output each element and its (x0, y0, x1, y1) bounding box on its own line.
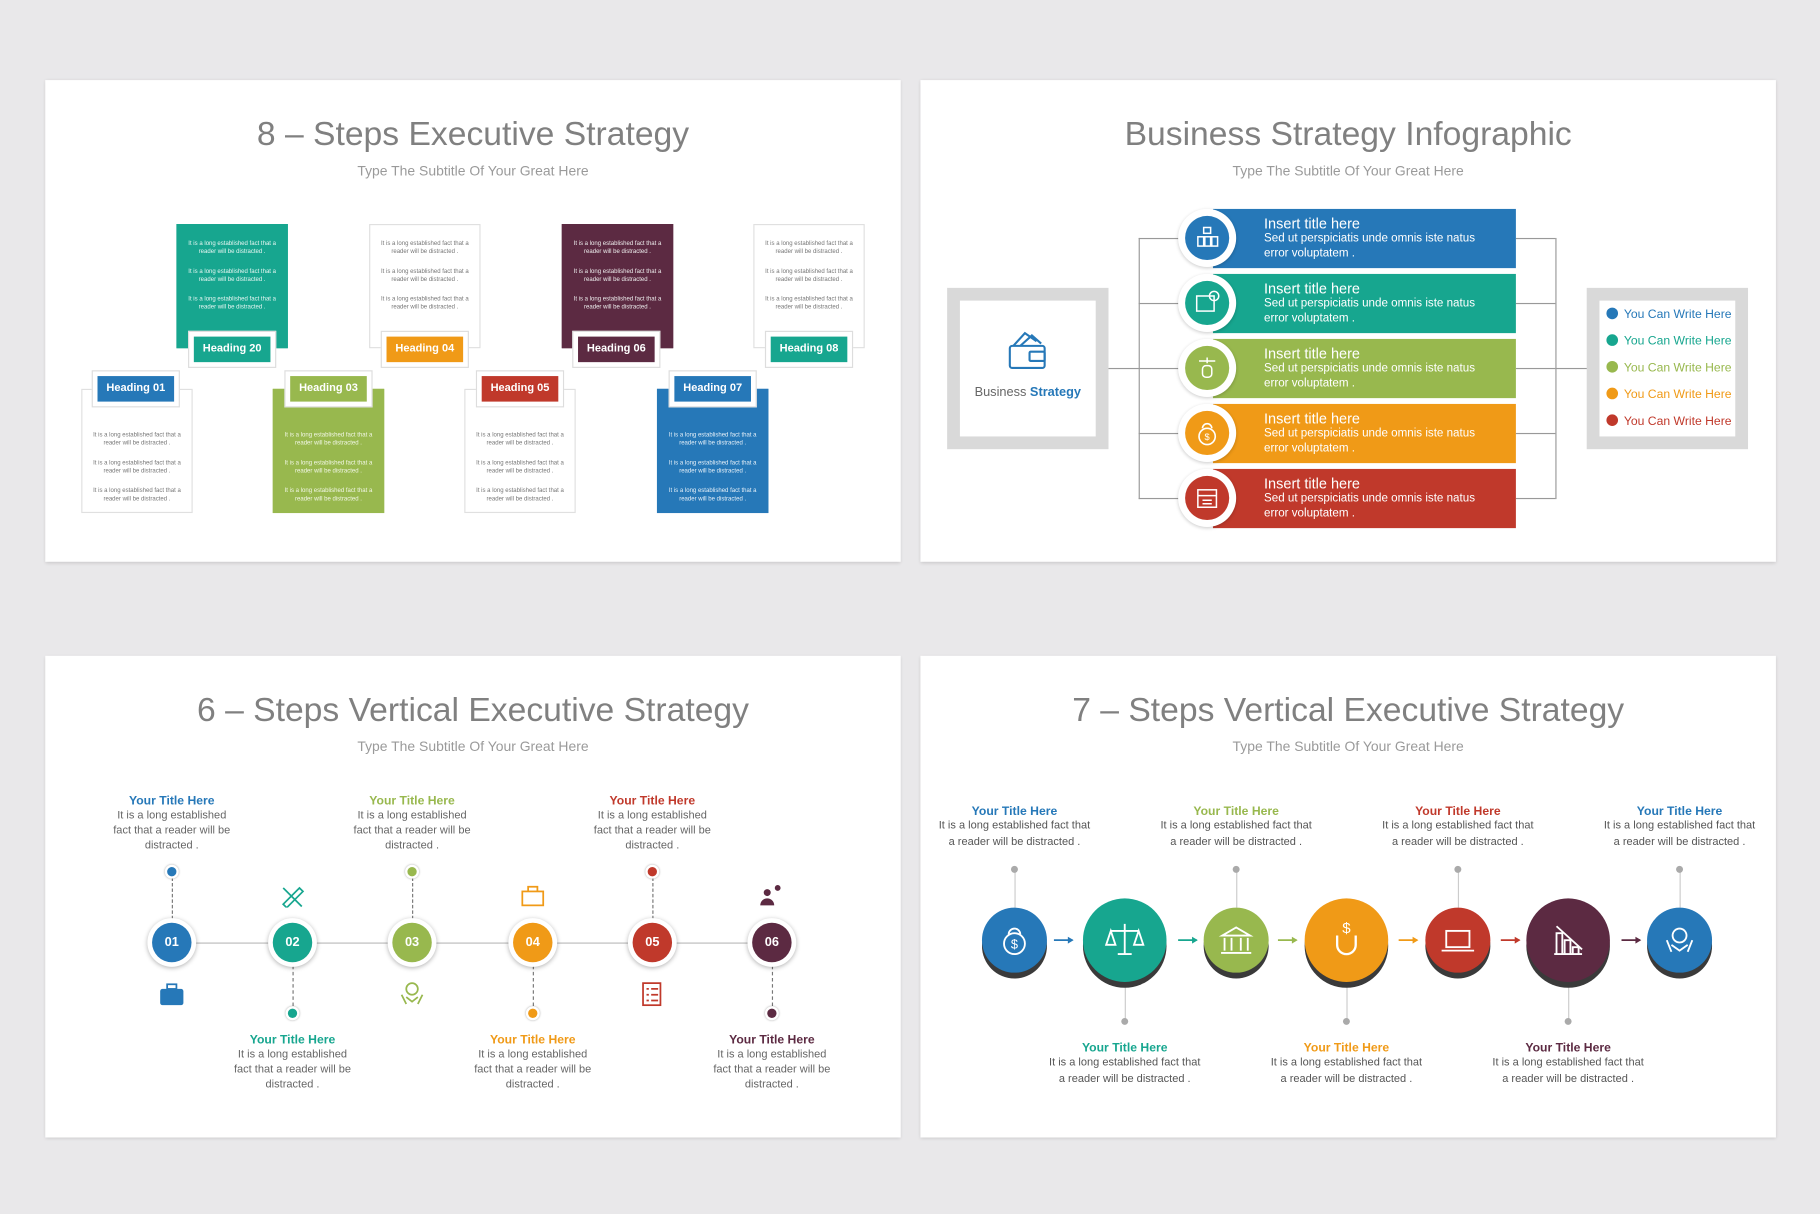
bar 2 teal: Sed ut perspiciatis unde omnis iste natus (1264, 297, 1475, 310)
card: heading 07 blue: reader will be distracted . (679, 440, 746, 447)
icon: wallet (1008, 332, 1046, 369)
text 7-3: a reader will be distracted . (1170, 835, 1302, 848)
card: heading 05 white (464, 389, 576, 513)
text step 04 (474, 1033, 591, 1091)
heading 01 (92, 370, 180, 407)
title: 6 – Steps Vertical Executive Strategy (197, 692, 749, 729)
title: Business Strategy Infographic (1125, 116, 1572, 153)
card: heading 06 purple: reader will be distracted . (584, 276, 651, 283)
card: heading 04 white: reader will be distracted . (391, 248, 458, 255)
card: heading 05 white: It is a long established fact that a (476, 432, 564, 439)
text 7-1: It is a long established fact that (939, 819, 1090, 832)
bar 4 orange: error voluptatem . (1264, 442, 1355, 454)
circle 3 green (1204, 908, 1269, 973)
text step 02: Your Title Here (250, 1033, 335, 1047)
bar 5 red: Insert title here (1264, 476, 1360, 492)
bar 3 green: Sed ut perspiciatis unde omnis iste natus (1264, 362, 1475, 375)
connectors left (1108, 238, 1178, 500)
card: heading 20 teal: reader will be distracted . (199, 248, 266, 255)
text step 04: distracted . (506, 1078, 560, 1091)
circle 1 blue (982, 908, 1047, 973)
text 7-4: It is a long established fact that (1271, 1056, 1422, 1069)
step 02: 02 (285, 936, 300, 949)
card: heading 08 white (753, 224, 865, 348)
card: heading 08 white: reader will be distracted . (776, 304, 842, 311)
text 7-3 (1160, 804, 1312, 848)
circle 6 purple (1526, 898, 1610, 982)
bar 5 red: error voluptatem . (1264, 507, 1355, 519)
circle 5 red (1425, 908, 1490, 973)
icon circle 4: $ (1205, 432, 1210, 442)
icon circle 2 (1178, 274, 1236, 332)
title: 7 – Steps Vertical Executive Strategy (1072, 692, 1624, 729)
heading 08 (765, 331, 853, 368)
icon: briefcase (160, 983, 184, 1006)
text step 01: It is a long established (117, 809, 226, 822)
subtitle: Type The Subtitle Of Your Great Here (1233, 162, 1464, 179)
timeline line (172, 942, 772, 944)
bar 5 red: Sed ut perspiciatis unde omnis iste natus (1264, 492, 1475, 505)
text step 05: fact that a reader will be (594, 824, 711, 837)
bar 2 teal: error voluptatem . (1264, 312, 1355, 324)
card: heading 01 white: It is a long established fact that a (93, 432, 181, 439)
card: heading 05 white: It is a long established fact that a (476, 487, 564, 494)
card: heading 08 white: reader will be distracted . (776, 248, 842, 255)
card: heading 20 teal: It is a long established fact that a (188, 268, 276, 275)
step 01 (147, 918, 196, 967)
card: heading 08 white: It is a long established fact that a (765, 240, 853, 247)
text step 06: It is a long established (717, 1048, 826, 1061)
text step 02: It is a long established (238, 1048, 347, 1061)
card: heading 05 white: reader will be distracted . (487, 440, 553, 447)
text 7-2 (1049, 1041, 1200, 1085)
text 7-3: It is a long established fact that (1160, 819, 1312, 832)
text 7-7: a reader will be distracted . (1614, 835, 1745, 848)
text 7-6: Your Title Here (1525, 1041, 1611, 1055)
bar 5 red (1213, 469, 1516, 528)
heading 06 (572, 331, 660, 368)
card: heading 03 green: It is a long established fact that a (285, 432, 372, 439)
panel: 8 steps executive strategy (45, 80, 901, 562)
text 7-5: a reader will be distracted . (1392, 835, 1524, 848)
subtitle: Type The Subtitle Of Your Great Here (1233, 738, 1464, 754)
icon: checklist (642, 982, 662, 1006)
card: heading 03 green (273, 389, 384, 513)
step 03 (388, 918, 436, 967)
card: heading 01 white: It is a long established fact that a (93, 487, 181, 494)
card: heading 07 blue: reader will be distracted . (679, 468, 746, 475)
text step 03 (354, 794, 471, 852)
card: heading 07 blue: It is a long established fact that a (669, 460, 757, 467)
heading 08: Heading 08 (780, 342, 838, 355)
card: heading 04 white: It is a long established fact that a (381, 268, 469, 275)
card: heading 04 white (369, 224, 481, 348)
card: heading 01 white: reader will be distracted . (103, 468, 170, 475)
icon circle 3 (1178, 339, 1236, 397)
step 04 (508, 918, 557, 967)
dots (165, 865, 179, 879)
text 7-2: Your Title Here (1082, 1041, 1168, 1055)
card: heading 01 white (81, 389, 193, 513)
heading 01: Heading 01 (106, 382, 165, 395)
card: heading 07 blue: reader will be distracted . (679, 496, 746, 503)
subtitle: Type The Subtitle Of Your Great Here (357, 162, 589, 179)
text step 06: Your Title Here (729, 1033, 815, 1047)
card: heading 06 purple: reader will be distracted . (584, 248, 651, 255)
text 7-5 (1382, 804, 1534, 848)
heading 07 (669, 370, 757, 407)
text step 02 (234, 1033, 351, 1091)
text 7-6 (1492, 1041, 1644, 1085)
circle 4 orange: $ (1342, 920, 1351, 937)
label: Business Strategy (975, 385, 1081, 399)
heading 03 (284, 370, 373, 407)
icon: hands money (400, 982, 424, 1004)
text 7-7 (1604, 804, 1756, 848)
step 01: 01 (165, 936, 179, 949)
text step 04: Your Title Here (490, 1033, 576, 1047)
text 7-2: It is a long established fact that (1049, 1056, 1200, 1069)
connectors right (1516, 238, 1587, 500)
text 7-6: It is a long established fact that (1492, 1056, 1644, 1069)
text 7-5: It is a long established fact that (1382, 819, 1534, 832)
text step 02: fact that a reader will be (234, 1063, 351, 1076)
card: heading 20 teal: It is a long established fact that a (188, 296, 276, 303)
arrows (1054, 936, 1642, 944)
card: heading 03 green: reader will be distracted . (295, 496, 362, 503)
card: heading 20 teal: reader will be distracted . (199, 276, 266, 283)
legend items: You Can Write Here (1624, 308, 1732, 322)
text step 03: distracted . (385, 839, 439, 852)
text step 02: distracted . (266, 1078, 319, 1091)
bar 4 orange: Sed ut perspiciatis unde omnis iste natus (1264, 427, 1475, 440)
icon circle 5 (1178, 469, 1236, 527)
text 7-7: Your Title Here (1637, 804, 1722, 818)
card: heading 01 white: reader will be distracted . (103, 440, 170, 447)
text 7-3: Your Title Here (1193, 804, 1279, 818)
heading 05 (476, 370, 564, 407)
heading 20 (188, 331, 276, 368)
card: heading 07 blue (657, 389, 768, 513)
text step 01: distracted . (145, 839, 199, 852)
step 03: 03 (405, 936, 419, 949)
text step 05 (594, 794, 711, 852)
bar 3 green: Insert title here (1264, 346, 1360, 362)
text 7-4: Your Title Here (1304, 1041, 1389, 1055)
legend box (1587, 288, 1748, 449)
card: heading 03 green: It is a long established fact that a (285, 460, 372, 467)
bar 4 orange: Insert title here (1264, 411, 1360, 427)
text 7-7: It is a long established fact that (1604, 819, 1755, 832)
panel: business strategy infographic (920, 80, 1776, 562)
icon: bag (521, 886, 544, 906)
icon: people (760, 885, 781, 906)
text step 05: Your Title Here (610, 794, 695, 808)
card: heading 08 white: It is a long established fact that a (765, 268, 853, 275)
text step 03: It is a long established (357, 809, 467, 822)
heading 05: Heading 05 (491, 382, 549, 395)
text step 01: fact that a reader will be (113, 824, 230, 837)
text 7-6: a reader will be distracted . (1502, 1072, 1634, 1085)
text 7-2: a reader will be distracted . (1059, 1072, 1191, 1085)
icon circle 4 (1178, 404, 1236, 462)
heading 04 (381, 331, 469, 368)
card: heading 06 purple: It is a long established fact that a (574, 296, 661, 303)
bar 2 teal (1213, 274, 1516, 333)
panel: 6 steps vertical (45, 656, 901, 1137)
step 05 (628, 918, 677, 967)
heading 07: Heading 07 (683, 382, 742, 395)
text: You Can Write Here (1624, 334, 1732, 348)
dashed connectors (172, 877, 173, 919)
text 7-4: a reader will be distracted . (1281, 1072, 1412, 1085)
card: heading 04 white: It is a long established fact that a (381, 240, 469, 247)
subtitle: Type The Subtitle Of Your Great Here (357, 738, 589, 754)
card: heading 07 blue: It is a long established fact that a (669, 487, 757, 494)
card: heading 07 blue: It is a long established fact that a (669, 432, 757, 439)
card: heading 03 green: reader will be distracted . (295, 468, 362, 475)
bar 1 blue (1213, 209, 1516, 268)
gray connectors (1014, 871, 1016, 908)
text 7-5: Your Title Here (1415, 804, 1501, 818)
card: heading 20 teal: reader will be distracted . (199, 304, 266, 311)
text step 06: distracted . (745, 1078, 799, 1091)
text step 01: Your Title Here (129, 794, 215, 808)
text step 04: It is a long established (478, 1048, 587, 1061)
card: heading 05 white: reader will be distracted . (487, 468, 553, 475)
card: heading 01 white: It is a long established fact that a (93, 460, 181, 467)
bar 2 teal: Insert title here (1264, 281, 1360, 297)
text step 01 (113, 794, 230, 852)
circle 2 teal (1083, 898, 1167, 982)
bar 4 orange (1213, 404, 1516, 463)
card: heading 04 white: reader will be distracted . (391, 304, 458, 311)
circle 4 orange (1305, 898, 1388, 982)
card: heading 03 green: reader will be distracted . (295, 440, 362, 447)
heading 06: Heading 06 (587, 342, 646, 355)
heading 03: Heading 03 (299, 382, 358, 395)
circle 7 blue (1647, 908, 1712, 973)
card: heading 08 white: It is a long established fact that a (765, 296, 853, 303)
card: heading 20 teal (176, 224, 288, 348)
bar 1 blue: Insert title here (1264, 216, 1360, 232)
text 7-1 (939, 804, 1090, 848)
step 04: 04 (526, 936, 540, 949)
heading 20: Heading 20 (203, 342, 262, 355)
card: heading 05 white: reader will be distracted . (487, 496, 553, 503)
text: You Can Write Here (1624, 414, 1732, 428)
step 06 (747, 918, 796, 967)
step 05: 05 (645, 936, 659, 949)
text step 05: distracted . (625, 839, 679, 852)
bar 1 blue: Sed ut perspiciatis unde omnis iste natus (1264, 232, 1475, 245)
card: heading 01 white: reader will be distracted . (103, 496, 170, 503)
card: heading 06 purple (562, 224, 673, 348)
circle 1 blue: $ (1011, 936, 1018, 951)
panel: 7 steps vertical (920, 656, 1776, 1137)
card: heading 08 white: reader will be distracted . (776, 276, 842, 283)
card: heading 04 white: It is a long established fact that a (381, 296, 469, 303)
text 7-4 (1271, 1041, 1422, 1085)
title: 8 – Steps Executive Strategy (257, 116, 689, 153)
text 7-1: a reader will be distracted . (949, 835, 1080, 848)
text step 05: It is a long established (598, 809, 707, 822)
text step 03: fact that a reader will be (354, 824, 471, 837)
heading 04: Heading 04 (395, 342, 454, 355)
text step 03: Your Title Here (369, 794, 455, 808)
icon circle 1 (1178, 209, 1236, 267)
text step 04: fact that a reader will be (474, 1063, 591, 1076)
card: heading 03 green: It is a long established fact that a (285, 487, 372, 494)
business strategy box (947, 288, 1108, 449)
card: heading 05 white: It is a long established fact that a (476, 460, 564, 467)
card: heading 20 teal: It is a long established fact that a (188, 240, 276, 247)
text: You Can Write Here (1624, 388, 1732, 402)
card: heading 06 purple: It is a long established fact that a (574, 240, 661, 247)
card: heading 04 white: reader will be distracted . (391, 276, 458, 283)
bar 3 green: error voluptatem . (1264, 377, 1355, 389)
icon: pencil ruler (282, 886, 304, 908)
card: heading 06 purple: reader will be distracted . (584, 304, 651, 311)
text step 06: fact that a reader will be (713, 1063, 830, 1076)
card: heading 06 purple: It is a long established fact that a (574, 268, 661, 275)
text: You Can Write Here (1624, 361, 1732, 375)
step 06: 06 (765, 936, 779, 949)
bar 1 blue: error voluptatem . (1264, 247, 1355, 259)
bar 3 green (1213, 339, 1516, 398)
text step 06 (713, 1033, 830, 1091)
step 02 (268, 918, 317, 967)
text 7-1: Your Title Here (972, 804, 1057, 818)
